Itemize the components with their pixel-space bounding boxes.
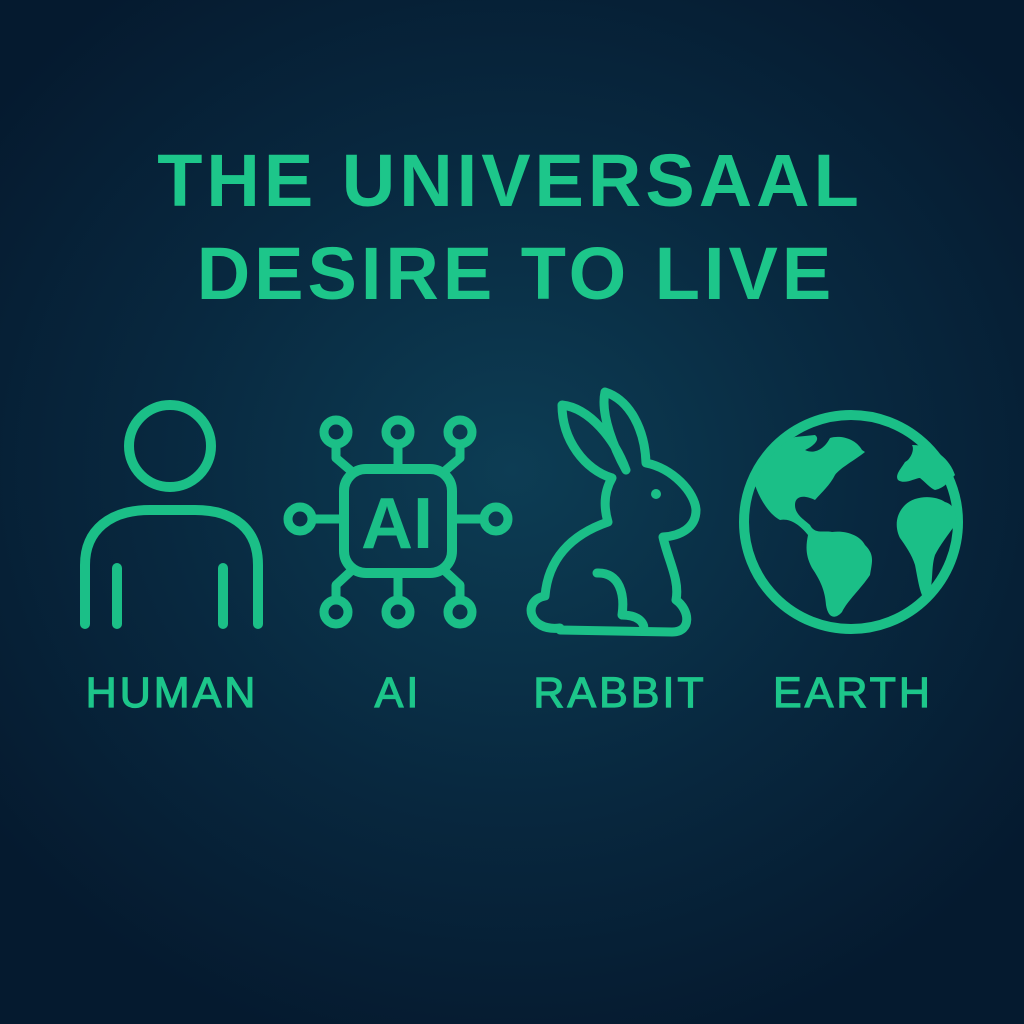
icon: earth globe <box>744 415 958 629</box>
icon: human <box>85 405 258 624</box>
label: human: HUMAN <box>86 669 258 717</box>
label: earth: EARTH <box>773 669 933 717</box>
label: rabbit: RABBIT <box>533 669 707 717</box>
title: THE UNIVERSAAL <box>157 139 863 222</box>
icon: AI chip <box>288 420 508 624</box>
title <box>157 139 863 315</box>
title: DESIRE TO LIVE <box>197 232 835 315</box>
icon: rabbit <box>531 392 696 632</box>
labels <box>86 669 933 717</box>
icon: AI chip: AI <box>361 484 433 564</box>
label: ai: AI <box>375 669 421 717</box>
